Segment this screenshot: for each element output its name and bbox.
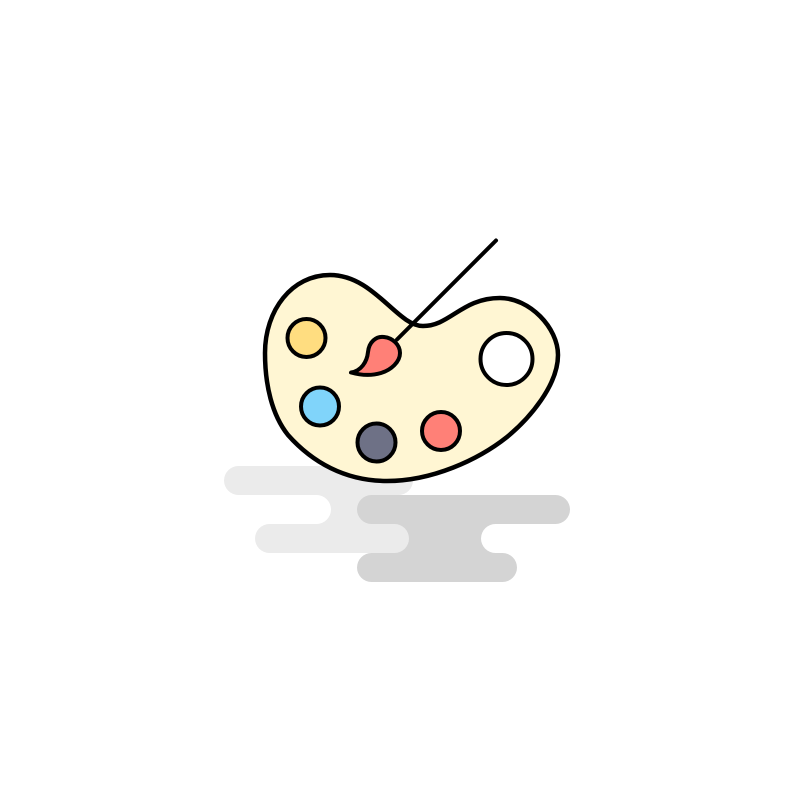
palette body xyxy=(265,275,558,481)
paint well: slate xyxy=(358,424,396,462)
paint well: coral xyxy=(422,412,460,450)
shadow: light grey upper cloud xyxy=(224,466,413,524)
paintbrush xyxy=(351,240,496,375)
shadow: dark grey cloud xyxy=(357,495,570,582)
brush handle xyxy=(397,240,496,340)
paint well: blue xyxy=(301,388,339,426)
shadow: light grey lower pill xyxy=(255,524,409,553)
brush tip xyxy=(351,337,400,375)
paint well: yellow xyxy=(288,319,326,357)
paint well: white xyxy=(480,333,532,385)
